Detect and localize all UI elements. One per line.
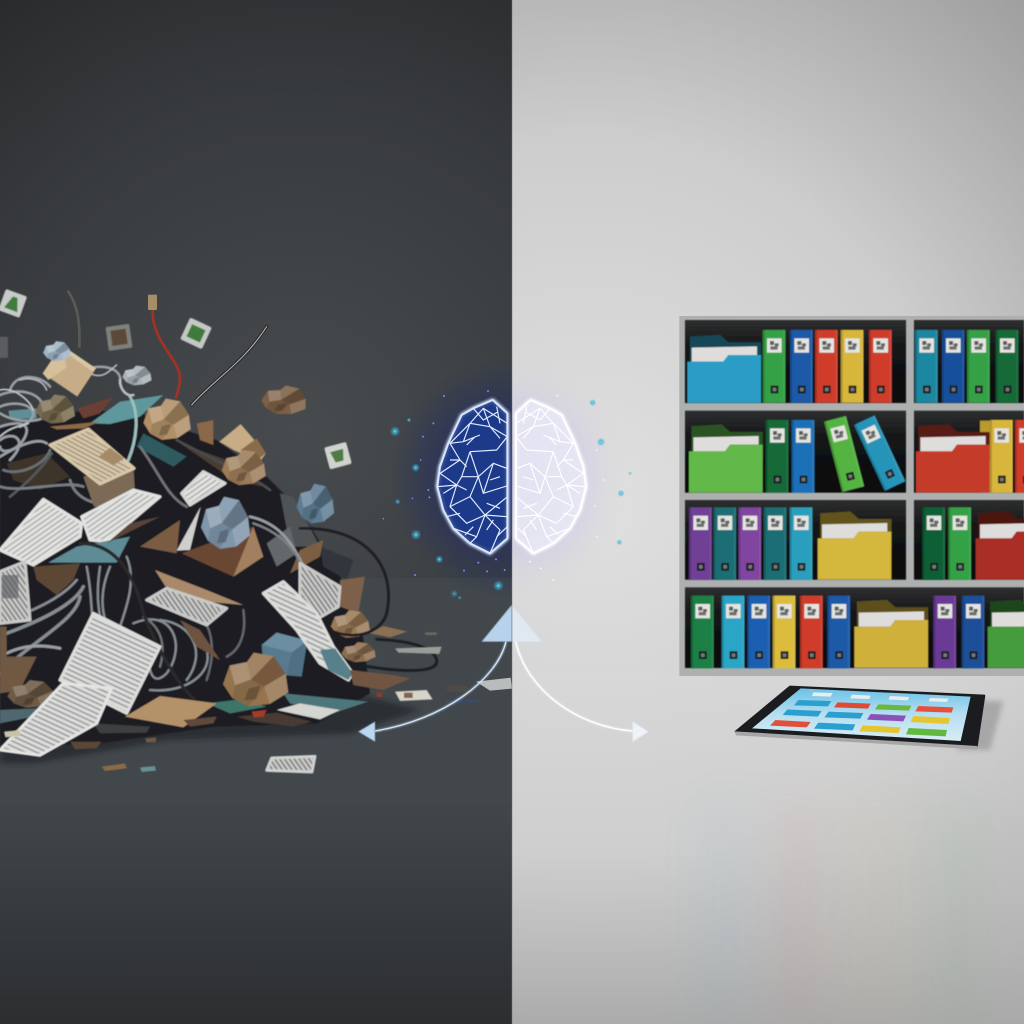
- up triangle, dark half: [482, 605, 512, 642]
- curved arrow to the left: [358, 642, 506, 742]
- connective scene: brain, particles and arrows: [358, 390, 648, 742]
- brain glow halo: [385, 350, 632, 606]
- tablet shadow: [957, 700, 1003, 750]
- bottom crumpled papers: [7, 653, 288, 708]
- organised bookshelf: [679, 316, 1024, 750]
- bottom scattered sheets: [0, 670, 411, 733]
- shelf frame: [679, 316, 1024, 676]
- floating icon tiles: [0, 289, 352, 470]
- long curled paper strip: [263, 582, 353, 680]
- teal end of paper strip: [320, 648, 353, 680]
- main dark mass of the pile: [0, 410, 370, 747]
- paper sheets, mid layer: [0, 472, 225, 623]
- shelf compartments: [685, 320, 1024, 668]
- long black wires: [80, 528, 437, 698]
- cream document: [50, 429, 134, 484]
- right side papers and cardboard: [300, 563, 407, 662]
- brain right hemisphere: [516, 400, 586, 553]
- row one contents: [687, 330, 1018, 403]
- right light floor: [512, 672, 1024, 1024]
- curved arrow to the right: [516, 642, 648, 742]
- blue cube: [262, 633, 307, 677]
- cardboard folders, mid layer: [0, 507, 263, 693]
- centre dividing line: [512, 0, 513, 1024]
- large document sheet: [60, 613, 160, 713]
- faint coloured floor reflections: [700, 800, 980, 1024]
- cardboard and teal sheets, back layer: [7, 395, 353, 580]
- tablet tiles: [770, 692, 953, 736]
- left dark floor: [0, 578, 512, 1024]
- glowing particles: [382, 390, 632, 600]
- row three contents: [689, 507, 1024, 580]
- pile shadow: [0, 697, 420, 763]
- right light background wall: [512, 0, 1024, 1024]
- small cardboard box, right: [219, 424, 266, 463]
- wire plug: [148, 295, 157, 310]
- tangled grey wires, upper left: [0, 365, 136, 503]
- curled bottom document: [0, 683, 112, 755]
- cube box on top: [43, 345, 96, 397]
- tablet device: [735, 687, 984, 749]
- tablet screen: [752, 688, 971, 741]
- brain left hemisphere: [437, 400, 507, 553]
- crumple below small box: [222, 450, 266, 485]
- loose scraps on floor: [4, 632, 442, 772]
- cardboard scrap on document: [99, 448, 124, 466]
- crumpled papers upper layer: [36, 341, 310, 440]
- loose wires above the pile: [68, 292, 267, 405]
- floor items near divider: [446, 678, 512, 703]
- left dark background wall: [0, 0, 512, 1024]
- up triangle, light half: [512, 605, 542, 642]
- row two contents: [689, 415, 1024, 493]
- blue crumpled papers: [201, 484, 334, 549]
- pile of clutter: [0, 289, 442, 772]
- open cardboard box, left: [83, 465, 135, 507]
- tangled wires, lower centre: [0, 440, 307, 690]
- row four contents: [691, 596, 1024, 668]
